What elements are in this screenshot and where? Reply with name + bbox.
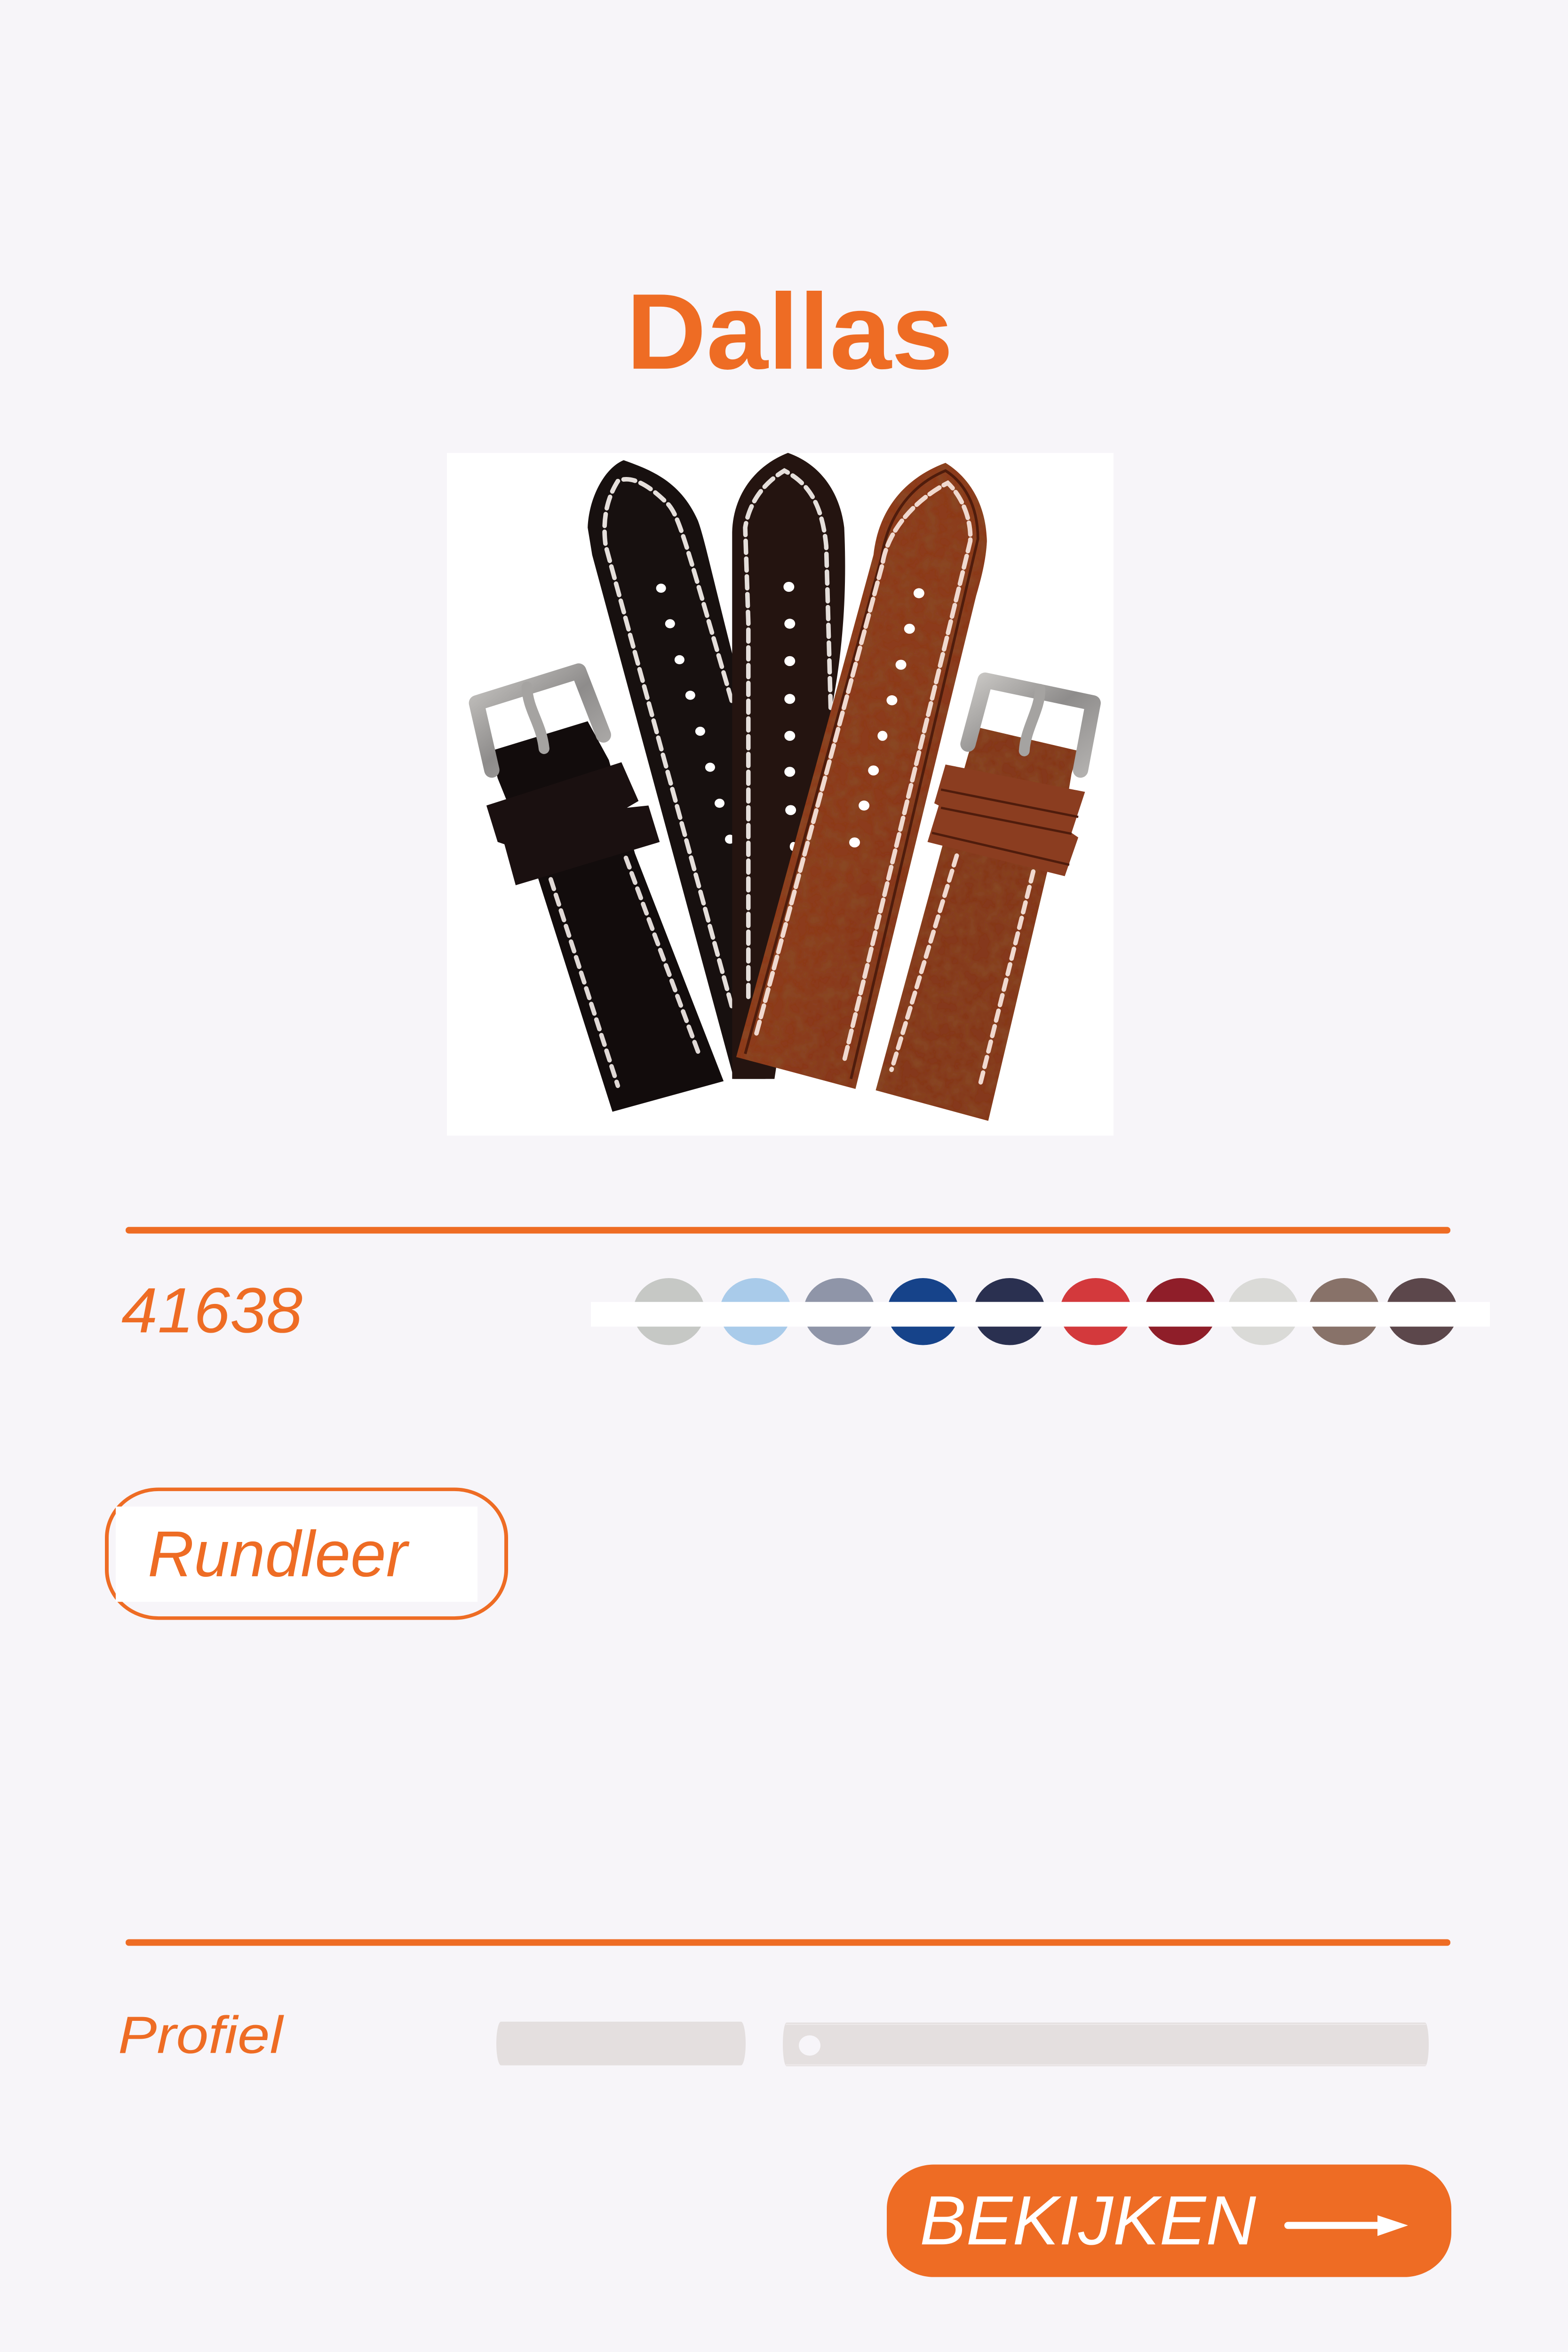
profile shape: keeper bbox=[496, 2022, 746, 2066]
button: BEKIJKEN bbox=[920, 2182, 1256, 2259]
strap: black long bbox=[588, 460, 765, 1079]
strap: brown with buckle bbox=[876, 680, 1093, 1121]
article number: 41638 bbox=[121, 1275, 302, 1346]
strap: dark brown long bbox=[732, 453, 845, 1079]
profile label: Profiel bbox=[118, 2006, 285, 2065]
button bbox=[887, 2165, 1451, 2277]
colour swatches bbox=[591, 1278, 1490, 1345]
material tag bbox=[107, 1489, 506, 1618]
icon: arrow bbox=[1284, 2215, 1408, 2236]
divider: bottom bbox=[126, 1939, 1450, 1946]
divider: top bbox=[126, 1227, 1450, 1233]
material tag: Rundleer bbox=[148, 1518, 410, 1590]
product photo: watch straps bbox=[447, 453, 1114, 1136]
title: Dallas bbox=[626, 272, 953, 392]
strap: brown long bbox=[736, 463, 987, 1089]
profile shape: strap bbox=[783, 2023, 1429, 2066]
strap: black with buckle bbox=[477, 671, 724, 1112]
